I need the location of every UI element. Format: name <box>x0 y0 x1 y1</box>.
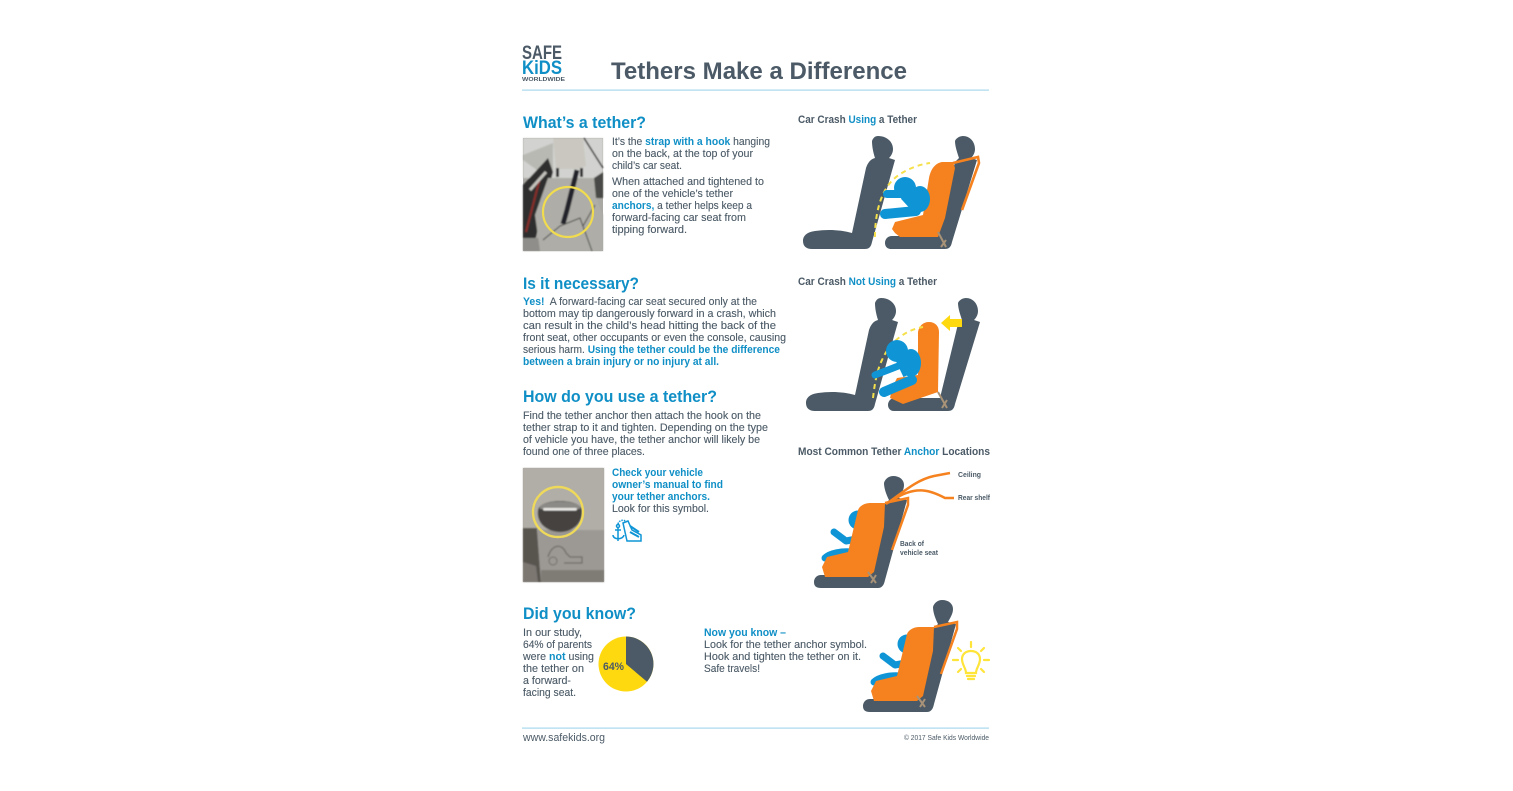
text: necessity explanation: serious harm. Using the tether could be the difference <box>523 344 780 356</box>
text: check your owner's manual: owner’s manual to find <box>612 479 723 491</box>
heading: did you know: Did you know? <box>523 604 636 623</box>
label: back of vehicle seat <box>900 541 939 557</box>
text: check your owner's manual: your tether anchors. <box>612 491 710 503</box>
pie chart: 64% of parents: 64% <box>603 661 624 673</box>
text: necessity explanation: bottom may tip dangerously forward in a crash, which <box>523 308 776 320</box>
text: strap description: tipping forward. <box>612 224 687 236</box>
heading: car crash not using a tether: Car Crash Not Using a Tether <box>798 276 938 288</box>
title: Tethers Make a Difference <box>611 58 907 85</box>
text: study result <box>522 627 594 699</box>
text: now you know <box>704 627 867 675</box>
text: study result: 64% of parents <box>523 639 592 651</box>
illustration: crash not using a tether <box>806 298 980 411</box>
text: strap description: child’s car seat. <box>612 160 682 172</box>
panel: did you know <box>522 604 867 699</box>
photo: tether anchor in vehicle <box>523 468 604 582</box>
text: check your owner's manual <box>612 467 723 515</box>
text: strap description <box>612 136 770 236</box>
panel: is it necessary <box>523 274 786 368</box>
footer: copyright: © 2017 Safe Kids Worldwide <box>904 734 989 742</box>
text: necessity explanation: Yes! A forward-facing car seat secured only at the <box>523 296 757 308</box>
text: usage instructions: found one of three places. <box>523 446 645 458</box>
text: study result: the tether on <box>523 663 584 675</box>
icon: light bulb <box>953 642 989 679</box>
heading: car crash using a tether: Car Crash Using a Tether <box>798 114 918 126</box>
text: necessity explanation: between a brain injury or no injury at all. <box>523 356 719 368</box>
arrow: seat tips forward <box>941 315 962 331</box>
pie chart: 64% of parents <box>598 636 654 692</box>
panel: what's a tether <box>523 113 770 251</box>
text: study result: were not using <box>522 651 594 663</box>
label: back of vehicle seat: vehicle seat <box>900 550 939 557</box>
text: necessity explanation <box>523 296 786 368</box>
illustration: crash using a tether <box>803 136 979 249</box>
text: usage instructions: Find the tether anchor then attach the hook on the <box>523 410 761 422</box>
text: strap description: forward-facing car seat from <box>612 212 746 224</box>
icon: tether anchor symbol <box>613 520 641 541</box>
text: check your owner's manual: Check your vehicle <box>612 467 703 479</box>
text: check your owner's manual: Look for this symbol. <box>612 503 709 515</box>
label: back of vehicle seat: Back of <box>900 541 925 548</box>
text: strap description: on the back, at the top of your <box>612 148 753 160</box>
text: necessity explanation: can result in the child’s head hitting the back of the <box>523 320 776 332</box>
text: now you know: Look for the tether anchor symbol. <box>704 639 867 651</box>
label: rear shelf: Rear shelf <box>958 495 991 502</box>
panel: how do you use a tether <box>523 387 768 582</box>
text: study result: In our study, <box>523 627 582 639</box>
text: necessity explanation: front seat, other occupants or even the console, causing <box>523 332 786 344</box>
text: strap description: When attached and tightened to <box>612 176 764 188</box>
text: now you know: Hook and tighten the tether on it. <box>704 651 861 663</box>
text: now you know: Now you know – <box>704 627 786 639</box>
text: usage instructions <box>523 410 768 458</box>
logo: Safe Kids Worldwide <box>522 43 566 83</box>
logo: Safe Kids Worldwide: WORLDWIDE <box>522 77 566 83</box>
text: usage instructions: of vehicle you have, the tether anchor will likely be <box>523 434 760 446</box>
text: now you know: Safe travels! <box>704 663 760 675</box>
heading: is it necessary: Is it necessary? <box>523 274 639 293</box>
text: strap description: It’s the strap with a hook hanging <box>612 136 770 148</box>
text: study result: a forward- <box>523 675 571 687</box>
heading: what's a tether: What’s a tether? <box>523 113 646 132</box>
photo: tether strap on vehicle seat <box>523 138 603 251</box>
logo: Safe Kids Worldwide: KiDS <box>522 58 562 79</box>
illustration: anchor locations <box>814 472 991 588</box>
text: usage instructions: tether strap to it and tighten. Depending on the type <box>523 422 768 434</box>
logo: Safe Kids Worldwide: SAFE <box>522 43 562 64</box>
heading: how do you use a tether: How do you use a tether? <box>523 387 717 406</box>
text: strap description: one of the vehicle’s tether <box>612 188 733 200</box>
text: study result: facing seat. <box>523 687 576 699</box>
text: strap description: anchors, a tether helps keep a <box>612 200 753 212</box>
label: ceiling: Ceiling <box>958 472 981 479</box>
footer: website: www.safekids.org <box>522 732 605 744</box>
heading: anchor locations: Most Common Tether Anchor Locations <box>798 446 990 458</box>
illustration: child in tethered seat <box>863 600 957 712</box>
